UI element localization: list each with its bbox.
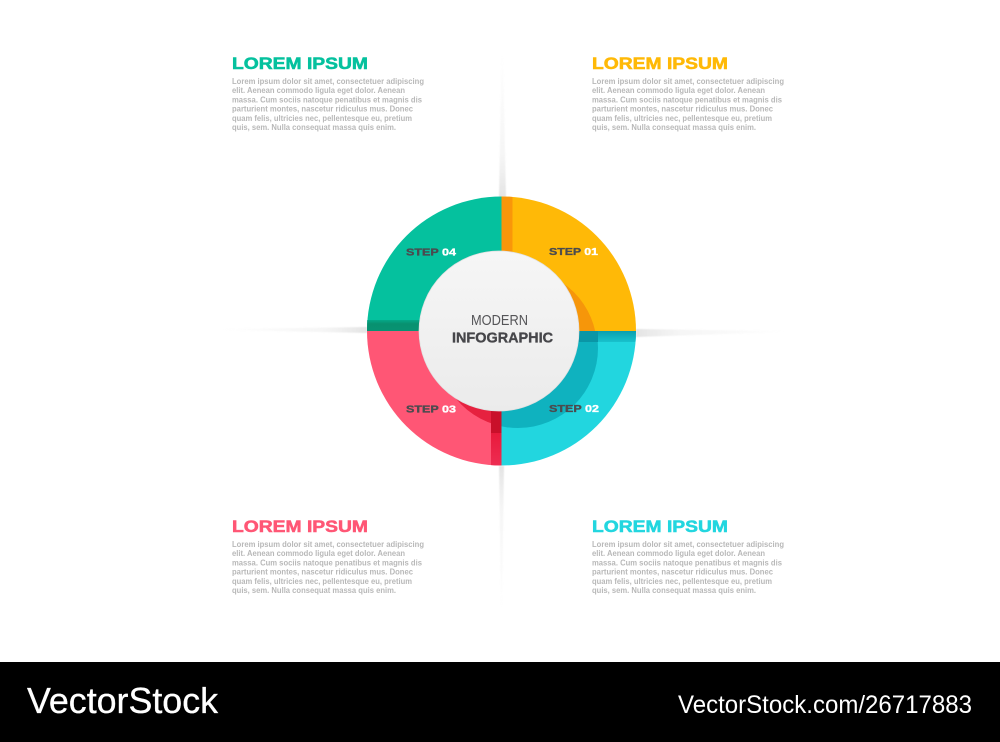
center title (452, 313, 553, 346)
body: massa. Cum sociis natoque penatibus et magnis dis (232, 557, 422, 567)
body: parturient montes, nascetur ridiculus mus. Donec (232, 104, 413, 114)
heading: LOREM IPSUM (232, 517, 368, 536)
text block: bottom right (592, 517, 784, 595)
body (592, 76, 784, 132)
body: quam felis, ultricies nec, pellentesque eu, pretium (592, 576, 772, 586)
body (232, 76, 424, 132)
crescent shadow: cyan (502, 331, 598, 428)
body: elit. Aenean commodo ligula eget dolor. Aenean (592, 85, 765, 95)
center title: MODERN (471, 313, 528, 329)
body: parturient montes, nascetur ridiculus mus. Donec (592, 104, 773, 114)
body: parturient montes, nascetur ridiculus mus. Donec (232, 567, 413, 577)
body: quam felis, ultricies nec, pellentesque eu, pretium (592, 113, 772, 123)
body: elit. Aenean commodo ligula eget dolor. Aenean (232, 85, 405, 95)
heading: LOREM IPSUM (232, 54, 368, 73)
heading: LOREM IPSUM (592, 54, 728, 73)
footer url: VectorStock.com/26717883 (678, 691, 972, 719)
text block: bottom left (232, 517, 424, 595)
body: quis, sem. Nulla consequat massa quis enim. (232, 122, 396, 132)
text block: top left (232, 54, 424, 132)
body: quis, sem. Nulla consequat massa quis enim. (592, 585, 756, 595)
center circle (419, 251, 579, 411)
body: quis, sem. Nulla consequat massa quis enim. (592, 122, 756, 132)
text block: top right (592, 54, 784, 132)
body: Lorem ipsum dolor sit amet, consectetuer adipiscing (232, 76, 424, 86)
body: massa. Cum sociis natoque penatibus et magnis dis (232, 94, 422, 104)
segment: step 04 green (367, 196, 502, 331)
body: quam felis, ultricies nec, pellentesque eu, pretium (232, 113, 412, 123)
label: step 04: STEP 04 (406, 248, 456, 258)
crease lines (222, 55, 785, 608)
crescent shadow: pink (456, 399, 502, 433)
body: elit. Aenean commodo ligula eget dolor. Aenean (592, 548, 765, 558)
label: step 01: STEP 01 (549, 247, 598, 258)
fold shadow: yellow strip (502, 196, 512, 252)
segment: step 02 cyan (502, 331, 636, 466)
body: Lorem ipsum dolor sit amet, consectetuer adipiscing (232, 539, 424, 549)
fold shadow: green band (367, 320, 425, 331)
body: parturient montes, nascetur ridiculus mus. Donec (592, 567, 773, 577)
body: elit. Aenean commodo ligula eget dolor. Aenean (232, 548, 405, 558)
segment: step 03 pink (367, 331, 502, 466)
label: step 03: STEP 03 (406, 404, 456, 416)
footer logo: VectorStock (27, 680, 219, 721)
body: quis, sem. Nulla consequat massa quis enim. (232, 585, 396, 595)
donut chart (367, 190, 640, 470)
segment: step 01 yellow (502, 196, 636, 331)
body: massa. Cum sociis natoque penatibus et magnis dis (592, 94, 782, 104)
body: massa. Cum sociis natoque penatibus et magnis dis (592, 557, 782, 567)
footer bar (0, 662, 1000, 742)
heading: LOREM IPSUM (592, 517, 728, 536)
fold shadow: pink strip (491, 433, 502, 466)
body: Lorem ipsum dolor sit amet, consectetuer adipiscing (592, 76, 784, 86)
body (592, 539, 784, 595)
fold shadow: cyan band (598, 331, 636, 342)
crescent shadow: yellow (564, 284, 595, 331)
center title: INFOGRAPHIC (452, 330, 553, 346)
body: quam felis, ultricies nec, pellentesque eu, pretium (232, 576, 412, 586)
body: Lorem ipsum dolor sit amet, consectetuer adipiscing (592, 539, 784, 549)
body (232, 539, 424, 595)
label: step 02: STEP 02 (549, 404, 599, 415)
